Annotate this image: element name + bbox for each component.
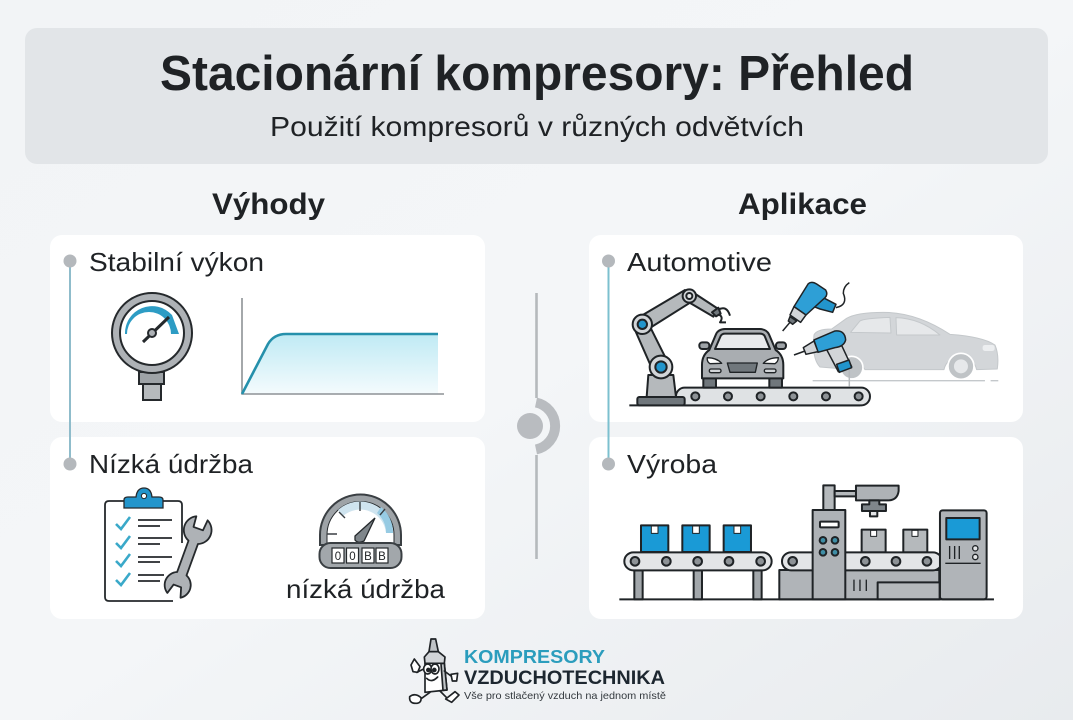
icon: wrench (161, 514, 215, 600)
illustration: production line (619, 485, 994, 599)
conveyor (629, 388, 870, 405)
heading: Výhody: Výhody (212, 188, 325, 221)
machine (779, 485, 987, 599)
icon: maintenance dial: 0 (335, 551, 341, 563)
panel: Výroba (589, 437, 1023, 619)
illustration: automotive assembly line (629, 282, 998, 405)
logo tagline: Vše pro stlačený vzduch na jednom místě (464, 690, 666, 702)
panel heading: Stabilní výkon: Stabilní výkon (89, 247, 264, 277)
panel: Stabilní výkon (50, 235, 485, 422)
panel: Automotive (589, 235, 1023, 422)
heading: Aplikace: Aplikace (738, 188, 867, 221)
icon: clipboard checklist (105, 488, 182, 601)
header panel (25, 28, 1048, 164)
robot arm (633, 289, 730, 405)
logo mascot (410, 639, 459, 703)
label: nízká údržba: nízká údržba (286, 574, 446, 604)
icon: maintenance dial: B (364, 551, 372, 563)
logo (410, 639, 666, 703)
icon: maintenance dial: 0 (349, 551, 356, 563)
panel heading: Výroba: Výroba (627, 449, 718, 479)
timeline: right column (602, 254, 615, 470)
icon: pressure gauge (112, 293, 192, 400)
subtitle: Použití kompresorů v různých odvětvích (270, 111, 804, 142)
logo wordmark: VZDUCHOTECHNIKA: VZDUCHOTECHNIKA (464, 668, 665, 689)
timeline: left column (64, 254, 76, 470)
panel heading: Nízká údržba: Nízká údržba (89, 449, 254, 479)
title: Stacionární kompresory: Přehled (160, 47, 914, 101)
panel: Nízká údržba (50, 437, 485, 619)
drill tool upper (783, 282, 849, 331)
chart: stable output curve (242, 298, 444, 394)
drill tool lower (794, 331, 852, 387)
ghost car (813, 312, 998, 381)
center divider (517, 293, 555, 559)
car on line (699, 329, 786, 388)
icon: maintenance dial (320, 495, 402, 568)
panel heading: Automotive: Automotive (627, 247, 772, 277)
blue boxes conveyor (624, 525, 772, 599)
icon: maintenance dial: B (378, 551, 386, 563)
logo wordmark: KOMPRESORY: KOMPRESORY (464, 647, 605, 667)
